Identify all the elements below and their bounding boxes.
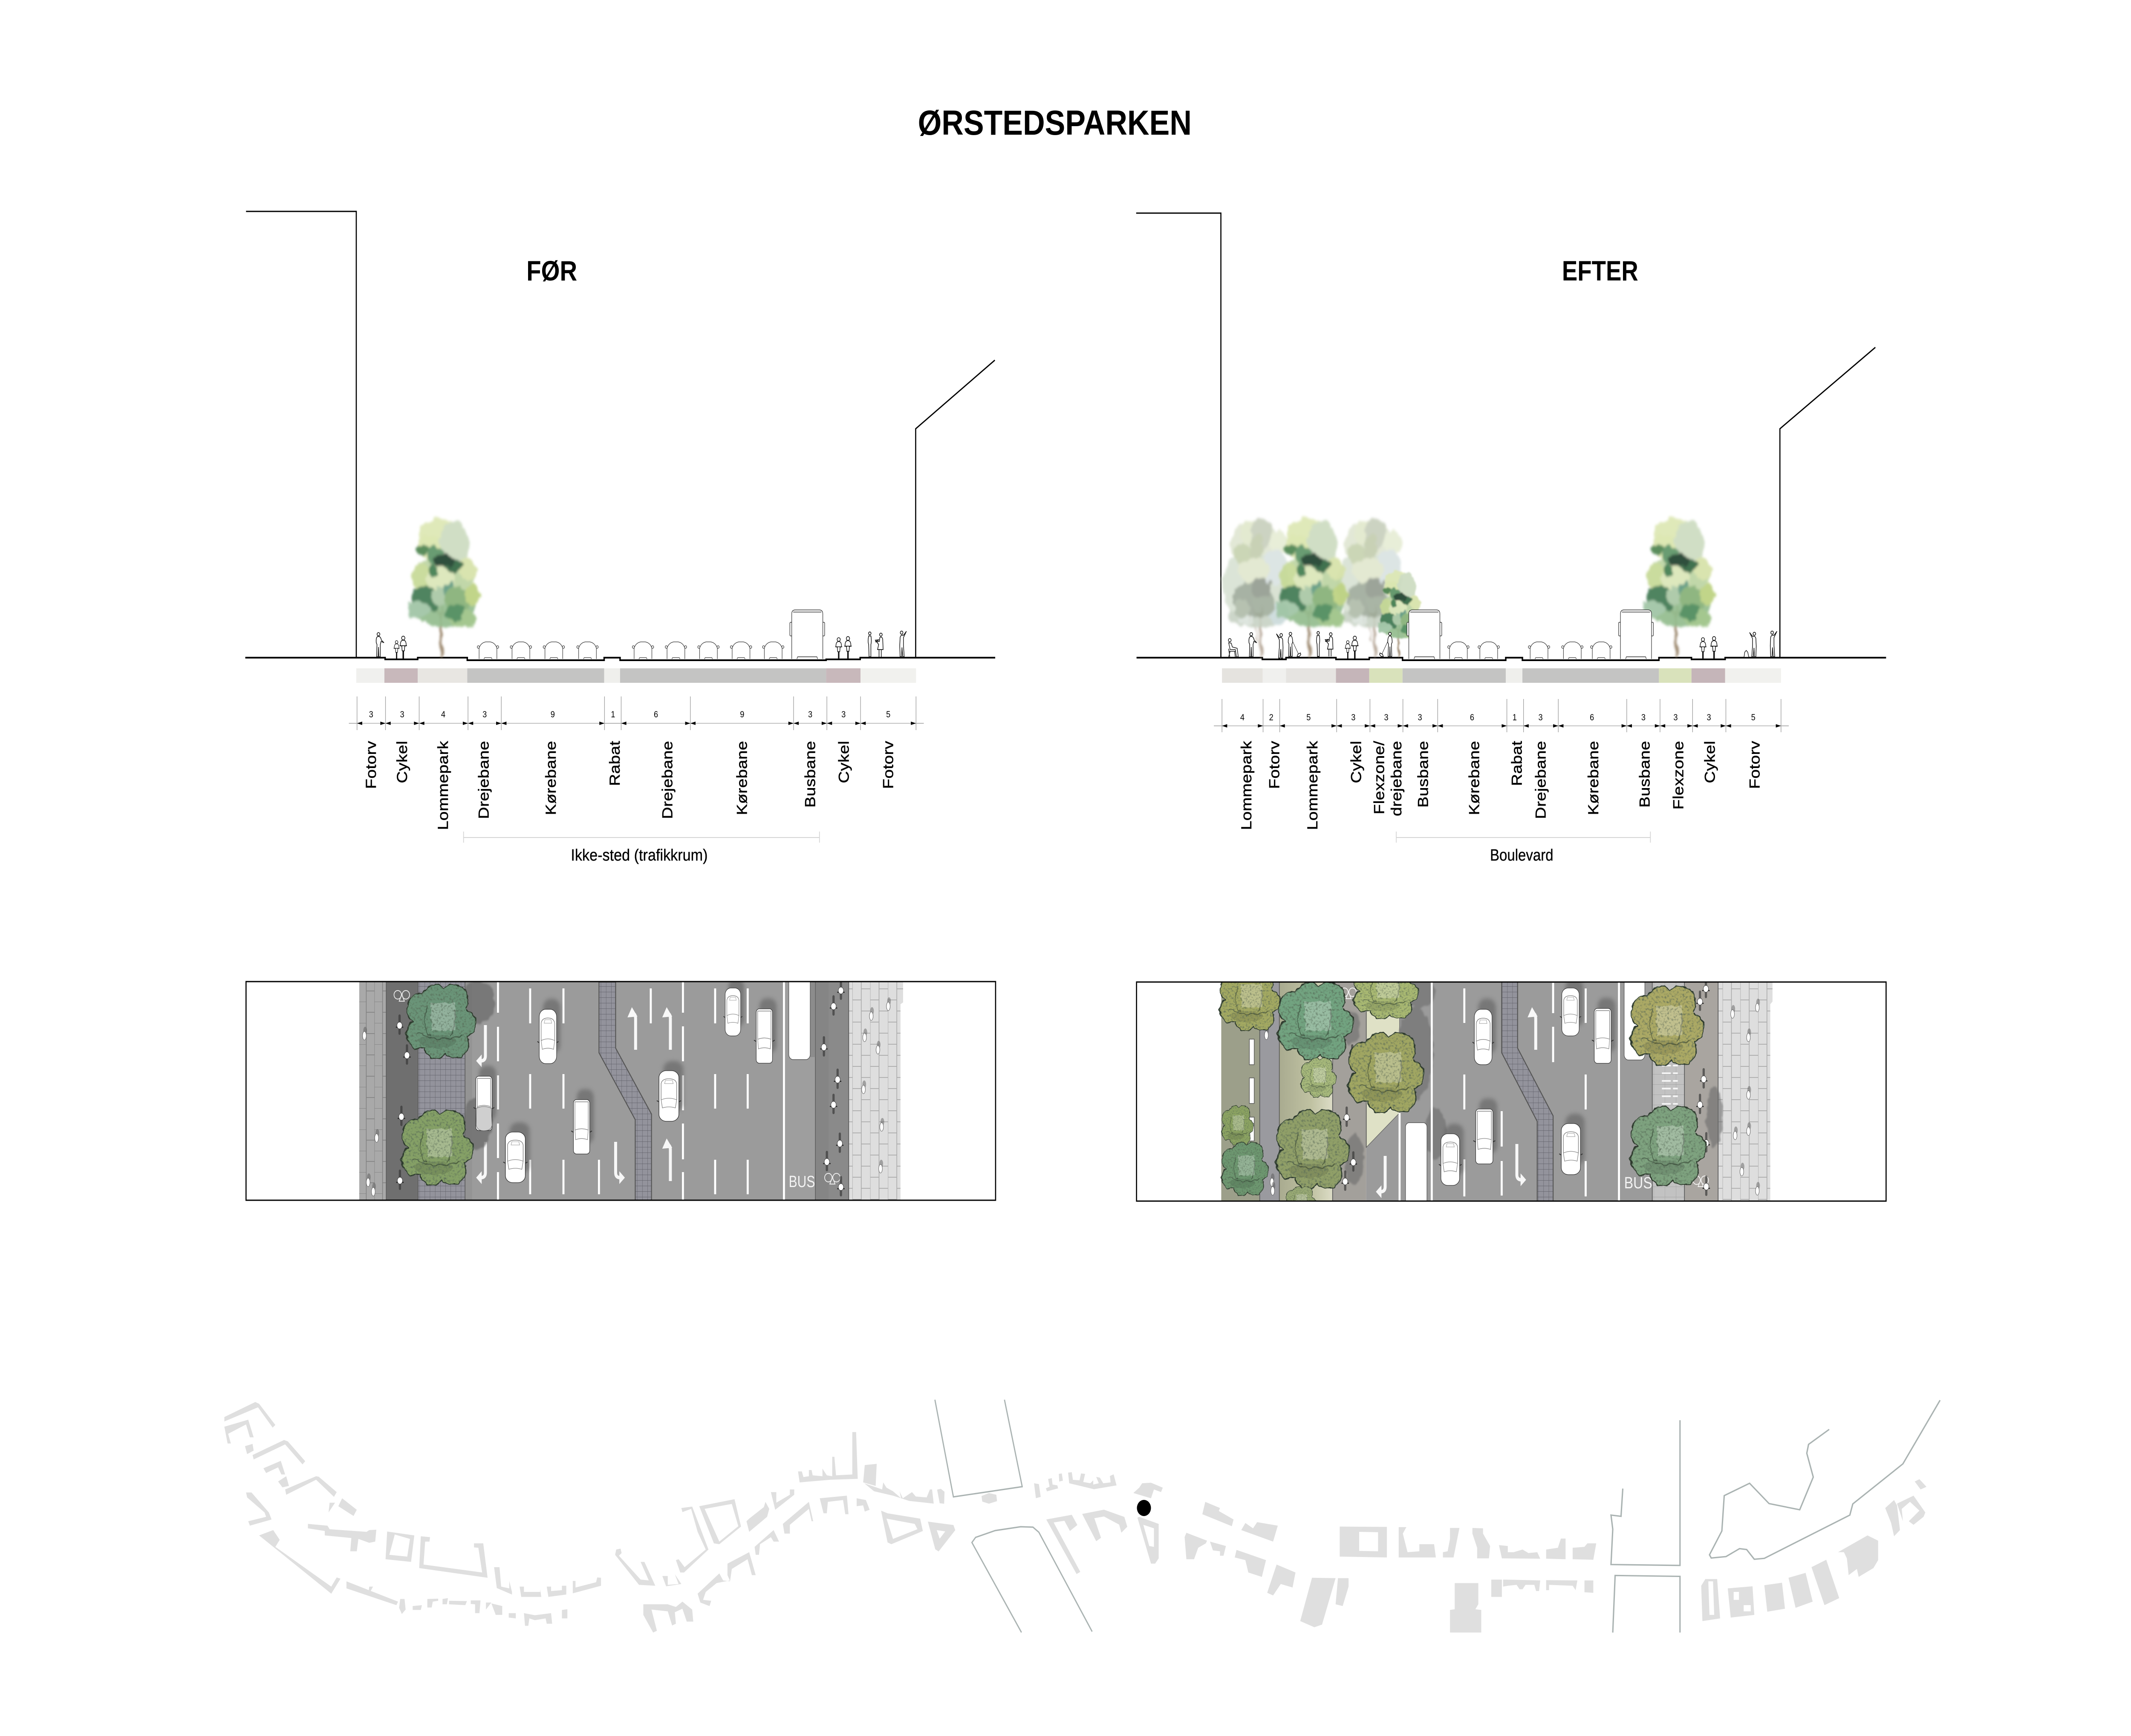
lane labels: Fotorv <box>1266 741 1282 789</box>
dimension line: 3 <box>1384 713 1389 722</box>
trees in plan <box>401 985 476 1185</box>
dimension line: 3 <box>808 710 812 719</box>
people <box>376 631 907 659</box>
lane labels: Drejebane <box>1533 741 1549 819</box>
heading: EFTER: EFTER <box>1562 255 1638 287</box>
colour band <box>1222 668 1781 683</box>
roads east <box>1611 1400 1940 1632</box>
dimension line: 3 <box>1539 713 1543 722</box>
frame <box>1137 982 1886 1201</box>
lane labels: Rabat <box>1509 741 1525 786</box>
cyclists and pedestrians <box>1265 978 1760 1196</box>
road text: BUS: BUS <box>789 1173 815 1191</box>
lane labels: Kørebane <box>1466 741 1482 815</box>
cars <box>474 979 777 1183</box>
lane labels: Drejebane <box>659 741 676 819</box>
trees in plan <box>1219 964 1706 1218</box>
lane labels: Cykel <box>394 741 410 783</box>
lane labels: Fotorv <box>1747 741 1763 789</box>
road arrows <box>1376 1007 1538 1198</box>
dimension line: 3 <box>1673 713 1678 722</box>
dimension line: 1 <box>611 710 615 719</box>
bracket: Ikke-sted: Ikke-sted (trafikkrum) <box>571 846 708 864</box>
dimension line: 9 <box>551 710 555 719</box>
colour band <box>356 668 916 683</box>
lane labels: Busbane <box>1637 741 1653 808</box>
dimension line <box>1214 699 1789 732</box>
dimension line <box>349 696 924 730</box>
lane labels: drejebane <box>1389 741 1405 816</box>
dimension line: 5 <box>886 710 890 719</box>
lane labels: Drejebane <box>476 741 492 819</box>
bracket: Boulevard: Boulevard <box>1490 846 1553 864</box>
bracket: Ikke-sted <box>464 832 820 864</box>
dimension line: 2 <box>1269 713 1273 722</box>
buildings west <box>224 1402 934 1632</box>
cyclists and pedestrians <box>363 979 891 1196</box>
bicycle symbols <box>1341 988 1709 1187</box>
tree shadows <box>1342 979 1723 1185</box>
panel: plan before <box>246 976 996 1200</box>
panel: plan after <box>1137 964 1886 1218</box>
lane labels: Rabat <box>606 741 623 786</box>
dimension line: 3 <box>1707 713 1711 722</box>
buildings centre <box>928 1472 1127 1574</box>
central median <box>599 982 652 1200</box>
buildings east <box>1133 1400 1940 1632</box>
lane labels: Cykel <box>1702 741 1718 783</box>
road arrows <box>476 1007 672 1184</box>
lane labels: Lommepark <box>1238 741 1254 830</box>
lane labels: Kørebane <box>734 741 750 815</box>
bus <box>789 976 810 1060</box>
central median <box>1502 982 1553 1201</box>
frame <box>246 982 996 1200</box>
dimension line: 3 <box>1418 713 1422 722</box>
tree shadows <box>461 981 495 1150</box>
dimension line: 3 <box>841 710 846 719</box>
lane labels: Fotorv <box>880 741 896 789</box>
pavement and lane surfaces <box>359 982 903 1200</box>
tree <box>406 519 480 658</box>
dimension line: 4 <box>441 710 445 719</box>
dimension line: 4 <box>1240 713 1245 722</box>
pavement and lane surfaces <box>1221 982 1773 1201</box>
lane markings <box>498 982 784 1200</box>
lane labels: Lommepark <box>435 741 451 830</box>
street ground profile <box>245 658 995 660</box>
lane labels: Flexzone <box>1670 741 1686 809</box>
dimension line: 5 <box>1306 713 1311 722</box>
lane labels: Fotorv <box>363 741 379 789</box>
lane labels: Busbane <box>802 741 818 808</box>
lane labels: Kørebane <box>543 741 559 815</box>
dimension line: 3 <box>400 710 404 719</box>
panel: section after <box>1136 213 1886 864</box>
dimension line: 3 <box>369 710 373 719</box>
street ground profile <box>1137 658 1886 660</box>
lane markings <box>1400 982 1619 1201</box>
bracket: Boulevard <box>1396 832 1650 864</box>
lane labels <box>1238 740 1763 830</box>
location marker <box>1137 1500 1151 1516</box>
cars <box>1448 642 1612 659</box>
dimension line: 6 <box>654 710 658 719</box>
lane labels: Cykel <box>836 741 852 783</box>
cars <box>477 642 784 659</box>
dimension line: 9 <box>740 710 744 719</box>
road text: BUS: BUS <box>1624 1174 1652 1192</box>
dimension line: 6 <box>1470 713 1474 722</box>
people <box>1228 631 1777 659</box>
cars <box>1439 979 1615 1185</box>
lane labels: Kørebane <box>1585 741 1601 815</box>
bike parking <box>1662 1066 1678 1104</box>
heading: FØR: FØR <box>526 255 577 287</box>
dimension line: 1 <box>1513 713 1517 722</box>
lane labels: Lommepark <box>1305 741 1321 830</box>
bicycle symbols <box>394 991 840 1184</box>
lane labels: Flexzone/ <box>1371 740 1387 815</box>
dimension line: 6 <box>1590 713 1594 722</box>
panel: section before <box>245 211 995 864</box>
bus <box>790 610 825 659</box>
buses <box>1407 610 1653 659</box>
dimension line: 3 <box>482 710 487 719</box>
trees <box>1222 518 1715 657</box>
building outlines <box>1136 213 1875 658</box>
lane labels: Cykel <box>1348 741 1364 783</box>
buses <box>1406 976 1645 1208</box>
dimension line: 3 <box>1351 713 1355 722</box>
benches <box>1249 1039 1254 1141</box>
lane labels: Busbane <box>1415 741 1431 808</box>
roads centre <box>935 1400 1092 1632</box>
dimension line: 3 <box>1641 713 1646 722</box>
dimension line: 5 <box>1751 713 1756 722</box>
building outlines <box>246 211 995 658</box>
lane labels <box>363 741 896 830</box>
city map strip <box>224 1400 1940 1632</box>
title: ØRSTEDSPARKEN <box>918 103 1192 142</box>
